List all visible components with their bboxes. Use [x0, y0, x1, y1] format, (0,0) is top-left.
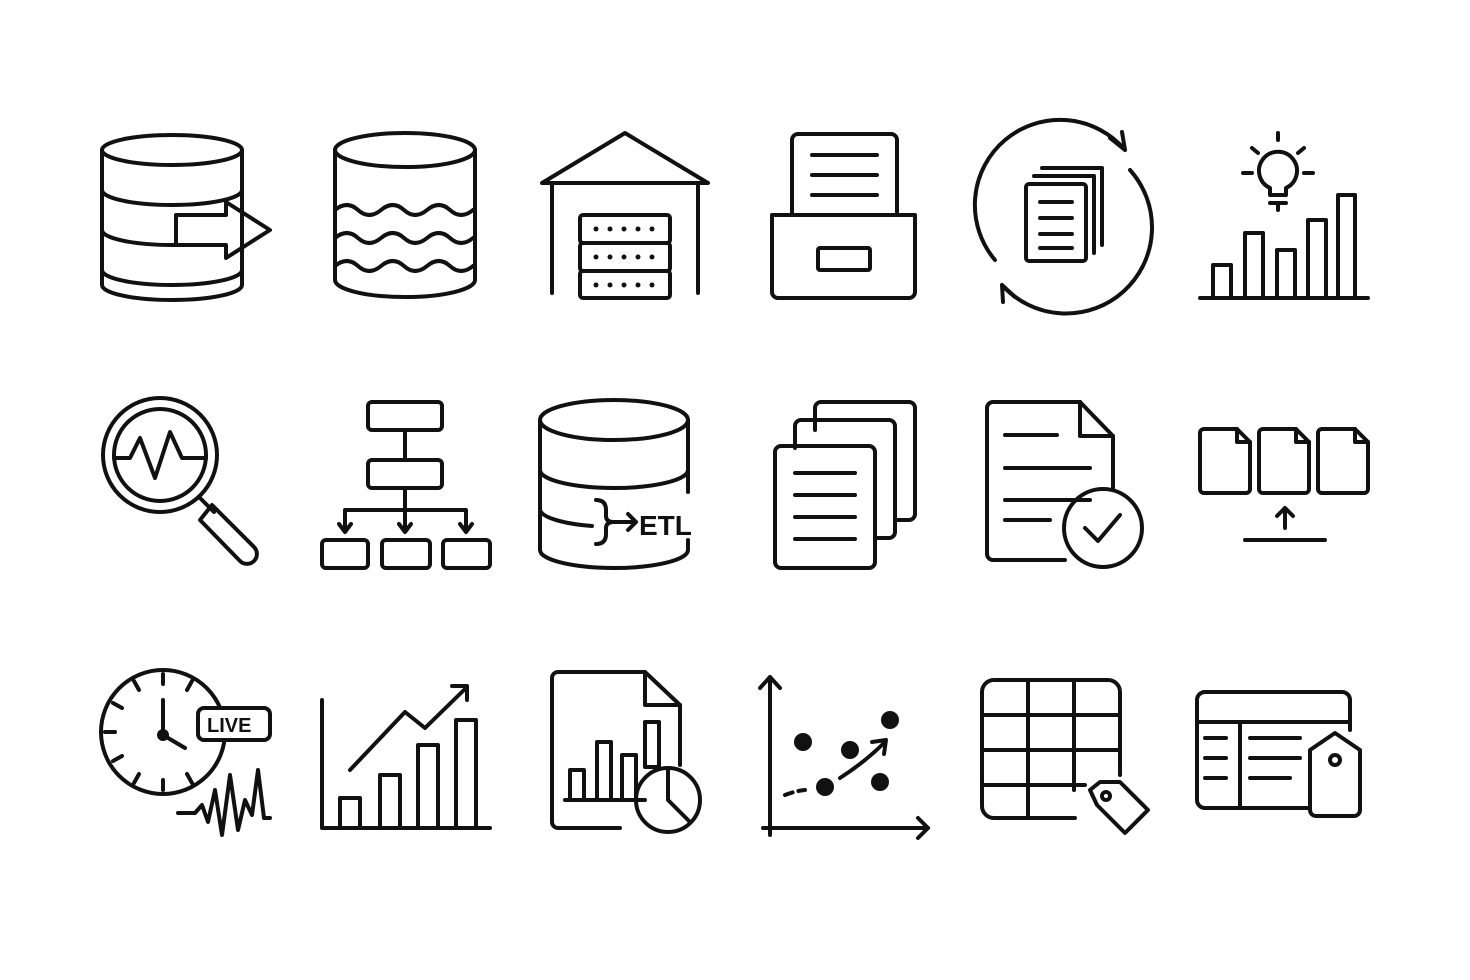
- icon: scatter plot: [760, 677, 928, 838]
- icon: magnifier with pulse: [103, 398, 257, 564]
- icon: report with pie: [552, 672, 700, 832]
- icon: warehouse: [542, 133, 708, 298]
- icon: files upload: [1200, 429, 1368, 540]
- icon: archive box: [772, 134, 915, 298]
- icon: stacked documents: [775, 402, 915, 568]
- icon: growth chart: [322, 686, 490, 828]
- icon: ETL database: ETL: [639, 510, 692, 541]
- icon: hierarchy: [322, 402, 490, 568]
- icon: database with arrow: [102, 135, 270, 300]
- icon: insight bar chart: [1200, 133, 1368, 298]
- icon: document with check: [987, 402, 1142, 567]
- icon: sync documents: [975, 120, 1152, 314]
- icon: live clock: LIVE: [207, 715, 251, 737]
- icon: layout with tag: [1197, 692, 1360, 816]
- icon: table with tag: [982, 680, 1148, 833]
- icon: live clock: [101, 670, 270, 835]
- icon: data lake: [335, 133, 475, 297]
- icon: ETL database: [540, 400, 692, 568]
